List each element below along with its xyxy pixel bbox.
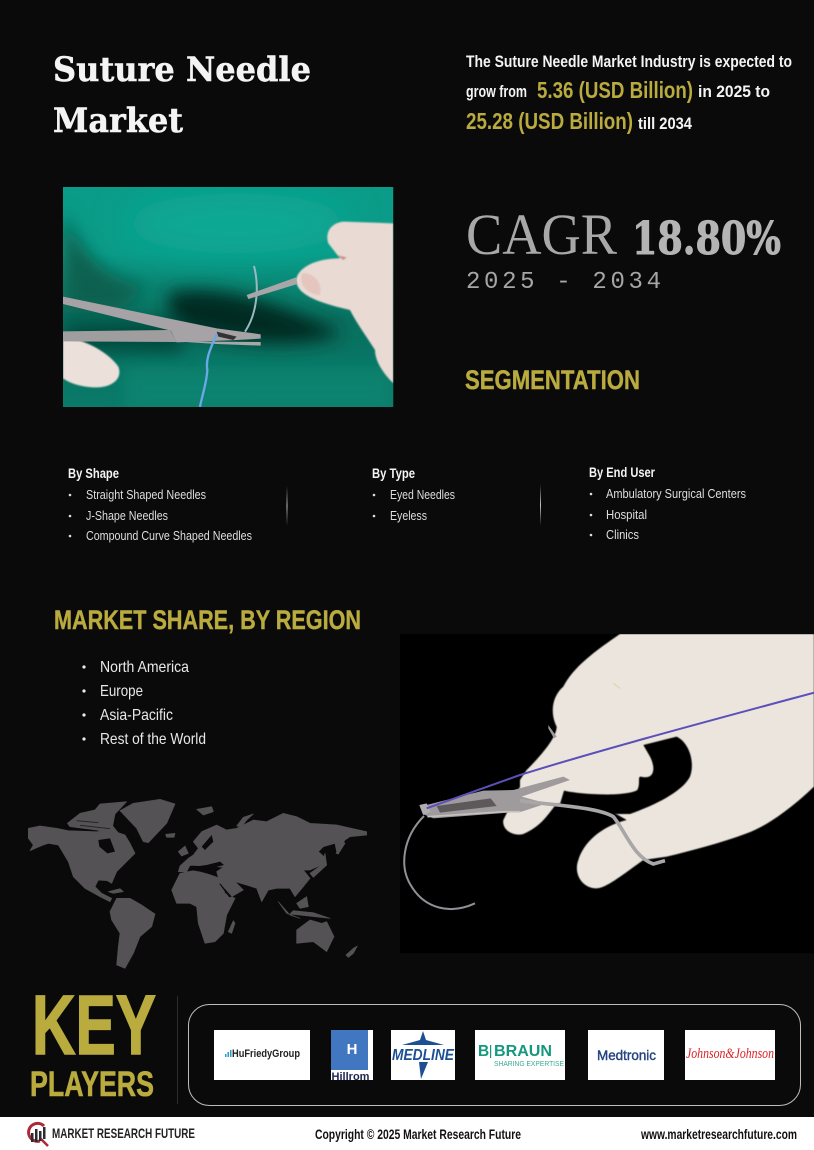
segment: by type	[372, 465, 455, 523]
CAGR: 2025 - 2034	[466, 269, 661, 296]
segment: by end user: Clinics	[606, 527, 639, 542]
key players heading: KEY	[32, 978, 156, 1072]
segment: by shape: Straight Shaped Needles	[86, 487, 206, 502]
market forecast text: grow from	[466, 82, 527, 101]
photo: needle holder on green drape	[63, 187, 393, 410]
key players panel	[188, 1004, 800, 1106]
region list: Asia-Pacific	[100, 707, 173, 724]
segment: by shape: J-Shape Needles	[86, 508, 168, 523]
needle	[245, 266, 257, 332]
segment: by shape	[68, 465, 252, 543]
CAGR	[466, 202, 781, 296]
right gloved hand	[296, 222, 393, 383]
logo: Johnson & Johnson	[685, 1030, 775, 1080]
segment: by type: Eyeless	[390, 508, 427, 523]
market forecast text	[466, 52, 792, 134]
market forecast text: in 2025 to	[698, 82, 770, 101]
logo: Medline: MEDLINE	[392, 1047, 455, 1064]
market forecast text: 25.28 (USD Billion)	[466, 108, 633, 134]
title: Suture Needle	[53, 50, 311, 90]
photo: gloved hand holding curved needle	[400, 634, 814, 953]
CAGR: CAGR	[466, 202, 617, 267]
footer: MARKET RESEARCH FUTURE	[52, 1125, 195, 1141]
logo: HuFriedy Group	[214, 1030, 310, 1080]
title	[53, 50, 311, 141]
market forecast text: till 2034	[638, 114, 692, 133]
glove	[503, 634, 814, 888]
left gloved hand	[63, 337, 119, 387]
logo: B. Braun: BRAUN	[494, 1043, 552, 1060]
logo: Hillrom: Hillrom	[332, 1071, 370, 1083]
segment: by type: By Type	[372, 465, 415, 481]
region list: Rest of the World	[100, 731, 206, 748]
heading: market share by region: MARKET SHARE, BY REGION	[54, 605, 361, 635]
key players heading	[30, 978, 156, 1104]
forceps	[420, 777, 570, 818]
logo: Medtronic	[588, 1030, 664, 1080]
world map	[28, 799, 367, 968]
logo: B. Braun: SHARING EXPERTISE	[494, 1059, 564, 1068]
blue suture	[200, 334, 217, 407]
footer: Copyright © 2025 Market Research Future	[315, 1126, 521, 1142]
logo: Johnson & Johnson: Johnson&Johnson	[686, 1046, 774, 1062]
logo: Hillrom: H	[347, 1041, 357, 1058]
curved needle	[404, 816, 475, 909]
segment: by type: Eyed Needles	[390, 487, 455, 502]
region list: Europe	[100, 683, 143, 700]
segment: by end user	[589, 464, 746, 542]
segment: by end user: Hospital	[606, 507, 647, 522]
logo: HuFriedy Group: HuFriedyGroup	[232, 1048, 300, 1060]
segment: by end user: Ambulatory Surgical Centers	[606, 486, 746, 501]
gap between fingers	[560, 737, 692, 814]
market forecast text: 5.36 (USD Billion)	[537, 77, 693, 103]
heading: segmentation: SEGMENTATION	[465, 365, 640, 395]
CAGR: 18.80%	[632, 212, 781, 265]
forceps	[247, 277, 297, 299]
logo: B. Braun: B	[478, 1043, 489, 1060]
logo: Hillrom	[331, 1030, 373, 1083]
logo: Medtronic: Medtronic	[597, 1047, 656, 1063]
title: Market	[53, 101, 183, 141]
segment: by shape: By Shape	[68, 465, 119, 481]
map lake and inland sea cutouts	[77, 821, 232, 897]
segment: by shape: Compound Curve Shaped Needles	[86, 528, 252, 543]
suture thread	[427, 693, 814, 808]
logo: B. Braun	[475, 1030, 565, 1080]
footer	[0, 1117, 814, 1150]
key players heading: PLAYERS	[30, 1065, 154, 1104]
region list	[82, 659, 206, 748]
logo: Medline	[391, 1030, 455, 1080]
region list: North America	[100, 659, 189, 676]
logo icon: market research future	[29, 1123, 48, 1146]
segment: by end user: By End User	[589, 464, 655, 480]
